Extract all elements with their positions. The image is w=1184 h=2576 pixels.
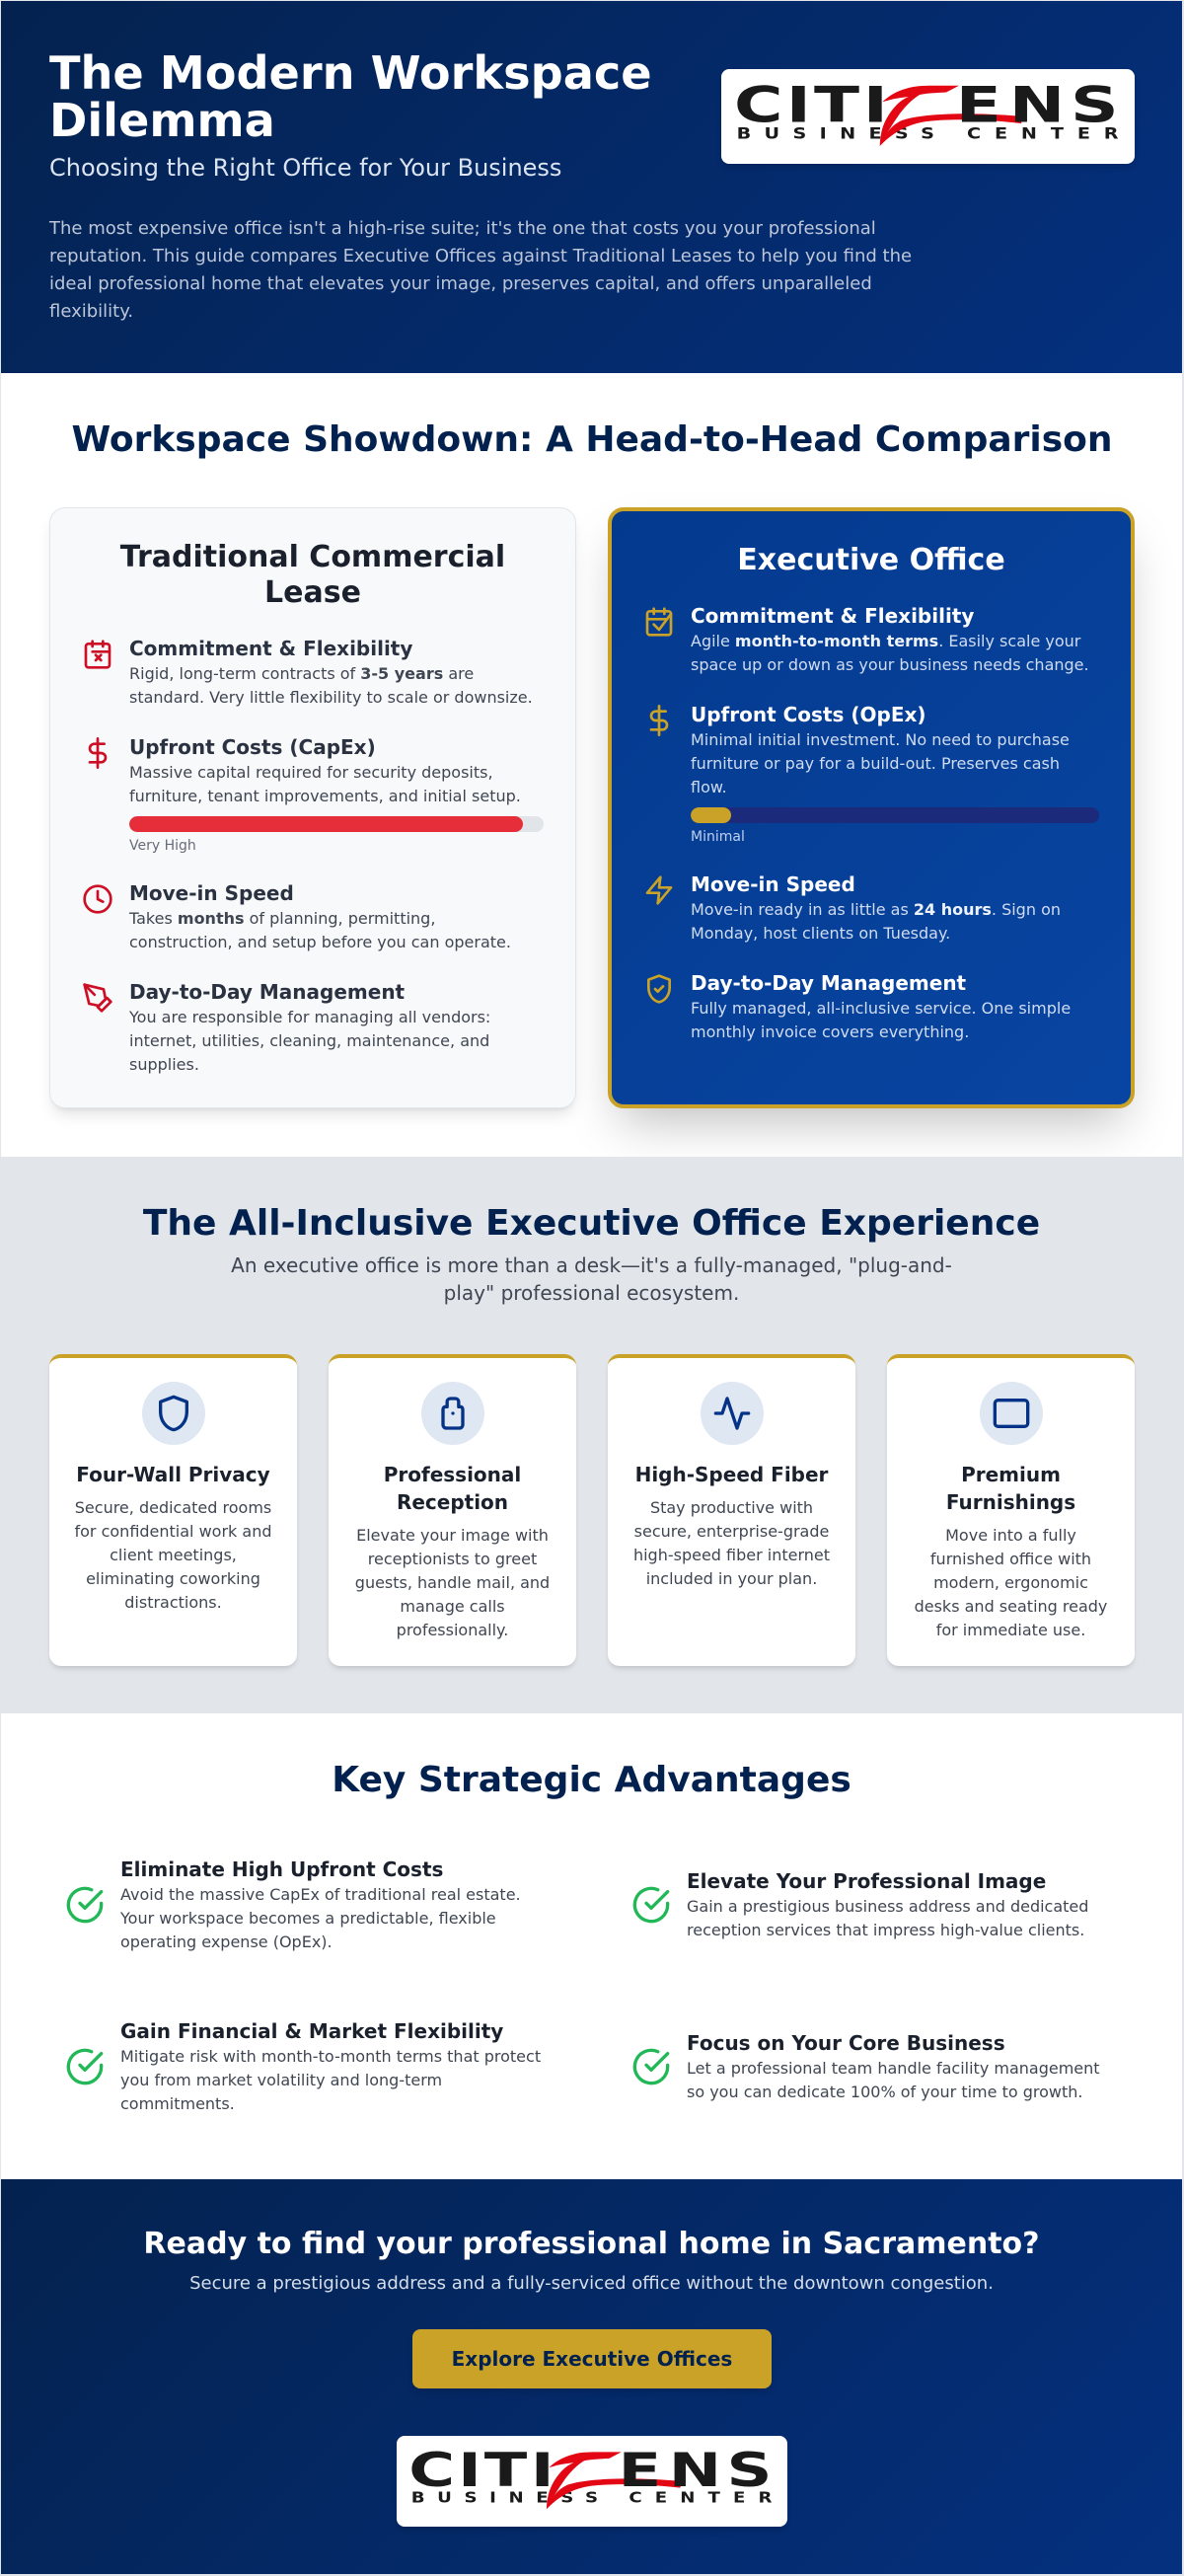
advantage: elevate your professional image: Elevate Your Professional Image (687, 1869, 1046, 1893)
panel: traditional commercial lease (49, 507, 576, 1108)
row: move-in speed: Takes months of planning, permitting, construction, and setup before you can operate. (129, 909, 511, 951)
panel heading: Traditional Commercial Lease (120, 540, 505, 610)
card: professional reception (329, 1354, 576, 1666)
subtitle: Choosing the Right Office for Your Business (49, 154, 561, 182)
row: commitment and flexibility: Commitment & Flexibility (129, 637, 412, 660)
row: move-in speed: Move-in Speed (691, 872, 855, 896)
bar: very high (129, 816, 544, 832)
advantage: elevate your professional image: Gain a prestigious business address and dedicated reception services that impress high-value clients. (687, 1897, 1088, 1939)
card: premium furnishings: Premium Furnishings (946, 1463, 1075, 1514)
row: move-in speed (645, 872, 1061, 943)
card: premium furnishings: Move into a fully furnished office with modern, ergonomic desks and seating ready for immediate use. (915, 1526, 1107, 1639)
icon: check circle (67, 1887, 103, 1923)
icon: rectangle (979, 1382, 1042, 1445)
section: all-inclusive experience (1, 1157, 1182, 1713)
row: move-in speed (83, 881, 511, 951)
advantage: eliminate high upfront costs (67, 1857, 521, 1951)
section: call to action (1, 2179, 1182, 2574)
card: high-speed fiber: High-Speed Fiber (635, 1463, 828, 1486)
row: commitment and flexibility: Rigid, long-term contracts of 3-5 years are standard. Very little flexibility to scale or downsize. (129, 664, 533, 707)
row: upfront costs: Minimal initial investment. No need to purchase furniture or pay for a build-out. Preserves cash flow. (691, 730, 1070, 796)
advantage: gain financial and market flexibility (67, 2019, 541, 2113)
icon: check circle (633, 1887, 669, 1923)
icon: reception (420, 1382, 483, 1445)
icon: clock (83, 884, 112, 914)
logo: Citizens Business Center (397, 2436, 787, 2527)
logo: Citizens Business Center: CITIENS (734, 77, 1119, 134)
icon: dollar (89, 737, 107, 769)
title: The Modern Workspace Dilemma (49, 46, 652, 147)
heading: Workspace Showdown: A Head-to-Head Comparison (71, 419, 1113, 460)
logo: Citizens Business Center: BUSINESS (411, 2488, 598, 2506)
card: premium furnishings (887, 1354, 1135, 1666)
icon: check circle (67, 2049, 103, 2084)
card: professional reception: Professional Reception (384, 1463, 521, 1514)
row: move-in speed: Move-in ready in as little as 24 hours. Sign on Monday, host clients on Tuesday. (691, 900, 1061, 943)
card: high-speed fiber (608, 1354, 855, 1666)
section lead text: An executive office is more than a desk—it's a fully-managed, "plug-and-play" professional ecosystem. (231, 1253, 952, 1305)
row: upfront costs (89, 735, 544, 854)
advantage: gain financial and market flexibility: Gain Financial & Market Flexibility (120, 2019, 503, 2043)
icon: pen tool (83, 983, 112, 1013)
advantage: eliminate high upfront costs: Avoid the massive CapEx of traditional real estate. Your workspace becomes a predictable, flexible operating expense (OpEx). (120, 1885, 521, 1951)
advantage: gain financial and market flexibility: Mitigate risk with month-to-month terms that protect you from market volatility and long-term commitments. (120, 2047, 541, 2113)
row: upfront costs: Upfront Costs (CapEx) (129, 735, 376, 759)
row: day-to-day management (83, 980, 490, 1074)
comparison cards (48, 507, 1149, 1148)
section: workspace showdown (48, 419, 1149, 1148)
advantage: eliminate high upfront costs: Eliminate High Upfront Costs (120, 1857, 443, 1881)
row: upfront costs: Upfront Costs (OpEx) (691, 703, 926, 726)
row: day-to-day management: Fully managed, all-inclusive service. One simple monthly invoice covers everything. (691, 999, 1071, 1041)
bar: minimal (691, 807, 1099, 823)
logo: Citizens Business Center (721, 69, 1135, 164)
logo: Citizens Business Center: CENTER (629, 2488, 773, 2506)
button (412, 2329, 772, 2388)
card: four-wall privacy: Secure, dedicated rooms for confidential work and client meetings, eliminating coworking distractions. (75, 1498, 272, 1612)
icon: check circle (633, 2049, 669, 2084)
bar label: Minimal (691, 829, 745, 845)
panel: executive office (608, 507, 1135, 1108)
advantage: elevate your professional image (633, 1869, 1088, 1939)
row: day-to-day management: Day-to-Day Management (691, 971, 966, 995)
logo: Citizens Business Center: CITIENS (408, 2444, 772, 2498)
intro paragraph: The most expensive office isn't a high-rise suite; it's the one that costs you your professional reputation. This guide compares Executive Offices against Traditional Leases to help you find the ideal professional home that elevates your image, preserves capital, and offers unparalleled flexibility. (49, 218, 912, 322)
row: day-to-day management: Day-to-Day Management (129, 980, 405, 1004)
row: commitment and flexibility (645, 604, 1089, 674)
row: commitment and flexibility (85, 637, 533, 707)
call to action text: Secure a prestigious address and a fully-serviced office without the downtown congestion. (189, 2273, 994, 2294)
button: Explore Executive Offices (452, 2347, 732, 2371)
card: high-speed fiber: Stay productive with secure, enterprise-grade high-speed fiber internet included in your plan. (633, 1498, 830, 1588)
row: upfront costs (649, 703, 1099, 845)
row: move-in speed: Move-in Speed (129, 881, 294, 905)
row: upfront costs: Massive capital required for security deposits, furniture, tenant improvements, and initial setup. (129, 763, 521, 805)
icon: shield check (647, 974, 671, 1004)
call to action heading: Ready to find your professional home in Sacramento? (143, 2227, 1040, 2261)
icon: calendar (85, 640, 111, 669)
icon: lightning (645, 875, 673, 905)
advantage: focus on your core business: Let a professional team handle facility management so you can dedicate 100% of your time to growth. (687, 2059, 1100, 2101)
icon: calendar check (645, 607, 673, 637)
bar label: Very High (129, 838, 196, 854)
header banner (1, 1, 1182, 373)
advantage: focus on your core business (633, 2031, 1100, 2101)
heading: Key Strategic Advantages (332, 1760, 851, 1800)
advantage: focus on your core business: Focus on Your Core Business (687, 2031, 1005, 2055)
heading: The All-Inclusive Executive Office Experience (143, 1203, 1040, 1244)
panel heading: Executive Office (737, 543, 1005, 577)
card: professional reception: Elevate your image with receptionists to greet guests, handle mail, and manage calls professionally. (355, 1526, 550, 1639)
card: four-wall privacy: Four-Wall Privacy (76, 1463, 270, 1486)
row: day-to-day management (647, 971, 1071, 1041)
icon: dollar (649, 705, 669, 736)
logo: Citizens Business Center: CENTER (967, 125, 1119, 143)
logo: Citizens Business Center: BUSINESS (737, 125, 934, 143)
row: commitment and flexibility: Commitment & Flexibility (691, 604, 974, 628)
row: day-to-day management: You are responsible for managing all vendors: internet, utilities, cleaning, maintenance, and supplies. (129, 1008, 490, 1074)
section: key strategic advantages (1, 1713, 1182, 2179)
icon: shield (142, 1382, 205, 1445)
row: commitment and flexibility: Agile month-to-month terms. Easily scale your space up or down as your business needs change. (691, 632, 1089, 674)
card: four-wall privacy (49, 1354, 297, 1666)
icon: activity pulse (701, 1382, 764, 1445)
